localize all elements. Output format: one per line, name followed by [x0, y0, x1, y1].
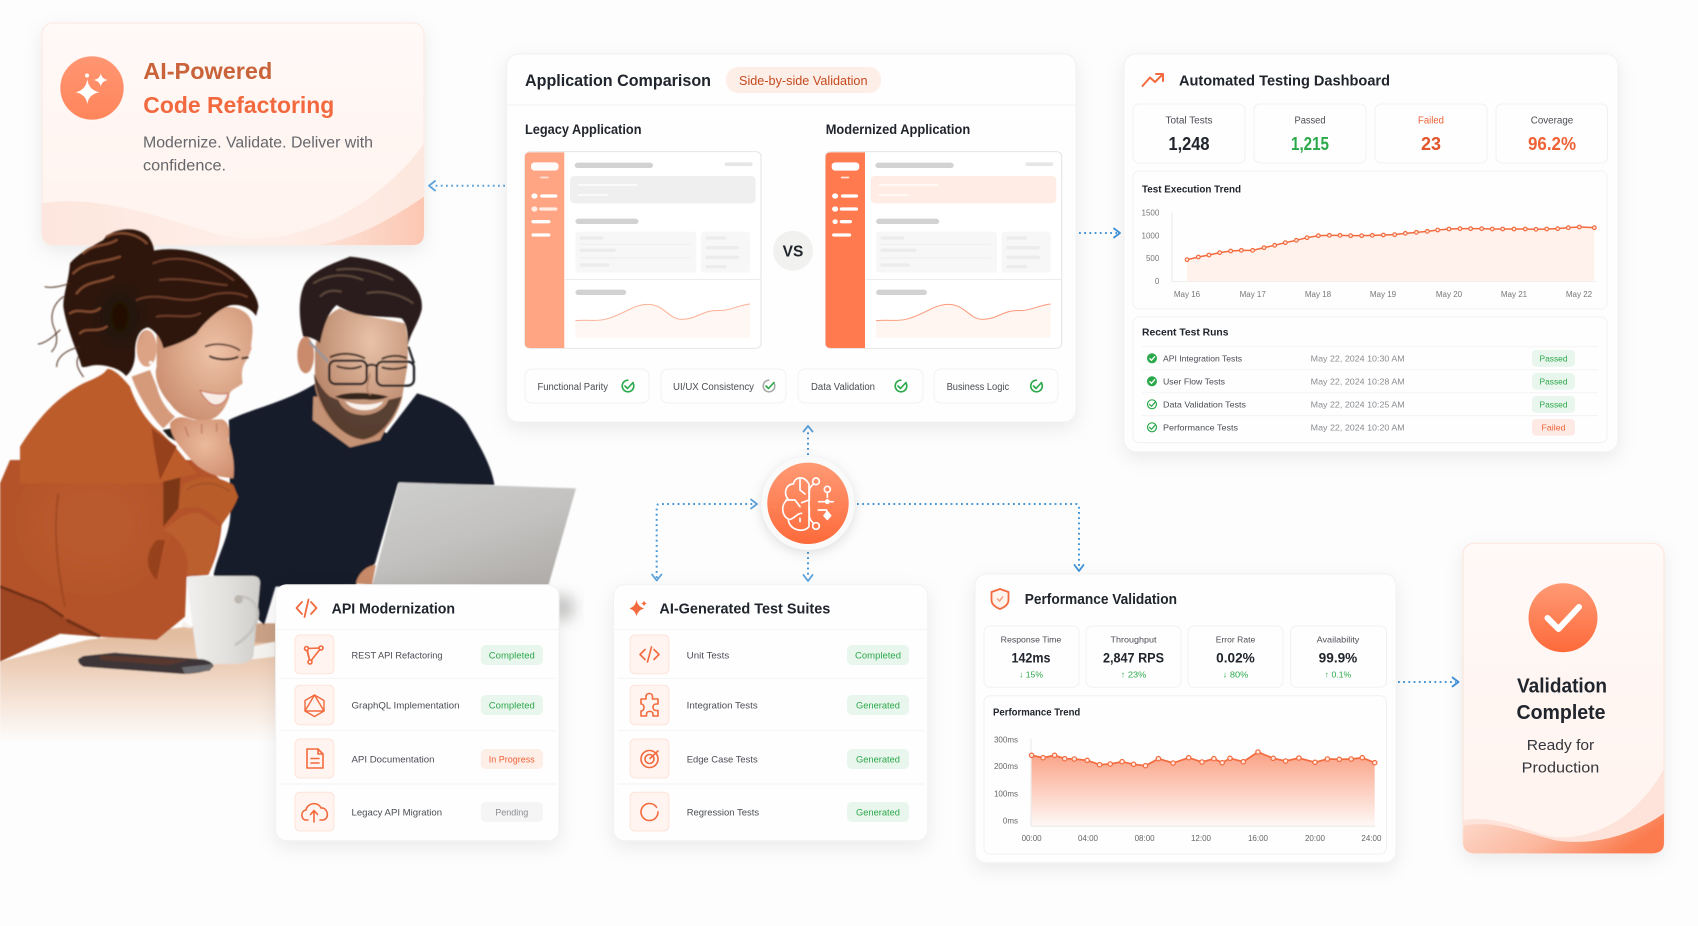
row: data validation tests: Data Validation Tests: [1163, 399, 1246, 409]
stat: error rate: 0.02%: [1216, 651, 1255, 666]
stat: passed: [1254, 104, 1366, 163]
photo: two people at a laptop: [0, 229, 576, 760]
row: API documentation: In Progress: [489, 754, 535, 765]
woman head: [20, 229, 258, 483]
row: data validation tests: May 22, 2024 10:25 AM: [1311, 399, 1405, 409]
row: edge case tests: Generated: [856, 754, 900, 765]
row: API integration tests: May 22, 2024 10:30 AM: [1311, 353, 1405, 363]
heading: Automated Testing Dashboard: [1179, 72, 1390, 89]
stat: availability: Availability: [1317, 634, 1360, 644]
panel: API Modernization: [276, 585, 559, 841]
stat: throughput: ↑ 23%: [1121, 670, 1147, 680]
stat: coverage: [1496, 104, 1608, 163]
heading: Performance Validation: [1025, 591, 1177, 608]
arrow: comparison to intro card: [429, 181, 505, 190]
chart: test execution trend: May 21: [1501, 290, 1528, 299]
icon: code brackets: [296, 600, 316, 617]
chart: performance trend: 0ms: [1003, 817, 1018, 826]
heading: Application Comparison: [525, 71, 711, 90]
row: user flow tests: Passed: [1540, 376, 1568, 386]
description: Modernize. Validate. Deliver with: [143, 134, 373, 152]
stat: failed: [1375, 104, 1487, 163]
row: integration tests: Integration Tests: [687, 700, 758, 712]
row: REST API refactoring: Completed: [489, 650, 535, 662]
stat: availability: 99.9%: [1319, 651, 1357, 666]
chart: performance trend: 12:00: [1191, 834, 1212, 843]
row: performance tests: Failed: [1542, 422, 1566, 432]
chip: UI/UX consistency: UI/UX Consistency: [673, 382, 754, 393]
badge: side-by-side validation: [726, 67, 881, 93]
table: [0, 613, 400, 760]
panel: Validation Complete: [1463, 543, 1664, 853]
chart: performance trend: 04:00: [1078, 834, 1099, 843]
row: unit tests: Completed: [855, 650, 901, 662]
row: API integration tests: Passed: [1540, 353, 1568, 363]
chart: test execution trend: May 17: [1240, 290, 1266, 299]
mockup: legacy application: [525, 152, 761, 348]
stat: passed: Passed: [1294, 115, 1326, 126]
woman sweater and arm: [0, 460, 238, 662]
panel: Performance Validation: [975, 574, 1396, 863]
row: data validation tests: Passed: [1540, 399, 1568, 409]
chip: functional parity: Functional Parity: [538, 382, 608, 393]
subtext: Ready for: [1527, 737, 1594, 754]
row: regression tests: Generated: [856, 808, 900, 818]
chip: UI/UX consistency: [661, 369, 786, 403]
stat: throughput: 2,847 RPS: [1103, 651, 1164, 666]
chart: performance trend: 100ms: [994, 789, 1018, 798]
description: [143, 134, 373, 174]
row: legacy API migration: [295, 792, 543, 831]
chart: test execution trend: May 16: [1174, 290, 1201, 299]
chip: business logic: Business Logic: [947, 382, 1009, 393]
row: unit tests: [630, 635, 909, 674]
stat: failed: 23: [1421, 134, 1441, 154]
chart: test execution trend: May 20: [1436, 290, 1463, 299]
row: edge case tests: [630, 739, 909, 778]
stat: error rate: [1188, 626, 1283, 687]
arrow: hub to performance: [857, 504, 1084, 571]
row: REST API refactoring: [295, 635, 543, 674]
row: data validation tests: [1148, 396, 1575, 413]
stat: failed: Failed: [1418, 115, 1444, 126]
arrow: hub to comparison: [804, 426, 812, 455]
description: confidence.: [143, 158, 226, 174]
subtext: [1522, 737, 1599, 777]
arrow: hub to test suites: [804, 552, 812, 581]
row: user flow tests: [1147, 373, 1575, 390]
man sweater: [214, 383, 494, 625]
chart: performance trend: 20:00: [1305, 834, 1326, 843]
stat: response time: ↓ 15%: [1019, 670, 1043, 680]
row: unit tests: Unit Tests: [687, 650, 729, 662]
stat: response time: Response Time: [1001, 634, 1062, 644]
chart: test execution trend: 1500: [1142, 208, 1160, 218]
subtext: Production: [1522, 760, 1599, 777]
row: performance tests: May 22, 2024 10:20 AM: [1311, 422, 1405, 432]
VS badge: VS: [783, 244, 803, 260]
chart: performance trend: Performance Trend: [993, 708, 1080, 719]
icon: check circle: [1528, 583, 1598, 652]
panel: AI-Powered Code Refactoring: [42, 23, 424, 245]
stat: error rate: Error Rate: [1216, 634, 1256, 644]
chart: test execution trend: [1133, 171, 1607, 309]
icon: shield: [992, 589, 1008, 609]
VS badge: [773, 231, 813, 271]
stat: throughput: Throughput: [1110, 634, 1157, 644]
icon: sparkles: [60, 56, 124, 120]
stat: response time: [984, 626, 1079, 687]
row: GraphQL implementation: Completed: [489, 700, 535, 712]
row: user flow tests: User Flow Tests: [1163, 376, 1225, 386]
row: API integration tests: [1147, 350, 1575, 367]
row: API integration tests: API Integration Tests: [1163, 353, 1242, 363]
row: GraphQL implementation: [295, 685, 543, 725]
subheading: legacy: Legacy Application: [525, 122, 642, 137]
arrow: comparison to dashboard: [1079, 228, 1120, 238]
subheading: modernized: Modernized Application: [826, 122, 970, 137]
row: API documentation: [295, 739, 543, 778]
mockup: modernized application: [826, 152, 1062, 348]
table: recent test runs: Recent Test Runs: [1142, 327, 1229, 339]
stat: total tests: [1133, 104, 1245, 163]
row: legacy API migration: Pending: [495, 808, 528, 818]
heading: AI-Generated Test Suites: [659, 600, 830, 617]
blurred object behind API card: [556, 600, 570, 615]
row: REST API refactoring: REST API Refactoring: [352, 650, 442, 662]
icon: trending up: [1142, 74, 1163, 86]
chip: data validation: [798, 369, 923, 403]
laptop: [356, 482, 576, 587]
chart: performance trend: [984, 696, 1386, 854]
panel: Automated Testing Dashboard: [1124, 54, 1618, 452]
heading: [143, 58, 334, 118]
row: user flow tests: May 22, 2024 10:28 AM: [1311, 376, 1405, 386]
row: integration tests: Generated: [856, 700, 900, 712]
heading: Code Refactoring: [143, 92, 334, 118]
arrow: performance to validation: [1398, 678, 1458, 686]
chart: performance trend: 200ms: [994, 762, 1018, 771]
heading: Complete: [1516, 702, 1606, 724]
stat: total tests: 1,248: [1168, 134, 1210, 154]
stat: response time: 142ms: [1012, 651, 1050, 666]
chart: test execution trend: May 22: [1566, 290, 1593, 299]
chart: performance trend: 16:00: [1248, 834, 1269, 843]
chart: test execution trend: Test Execution Trend: [1142, 184, 1241, 196]
chart: performance trend: 08:00: [1135, 834, 1155, 843]
chart: test execution trend: 1000: [1142, 232, 1160, 240]
row: regression tests: Regression Tests: [687, 808, 759, 818]
stat: total tests: Total Tests: [1166, 115, 1212, 126]
row: edge case tests: Edge Case Tests: [687, 754, 758, 765]
chip: data validation: Data Validation: [811, 382, 875, 393]
heading: [1516, 675, 1607, 724]
chart: performance trend: 300ms: [994, 735, 1018, 744]
mug and phone: [78, 576, 275, 674]
stat: coverage: 96.2%: [1528, 134, 1576, 154]
chip: functional parity: [525, 369, 649, 403]
chart: performance trend: 24:00: [1361, 834, 1382, 843]
stat: coverage: Coverage: [1531, 115, 1574, 126]
icon: sparkle: [630, 600, 647, 616]
chart: test execution trend: 500: [1146, 254, 1160, 263]
table: recent test runs: [1133, 317, 1607, 443]
row: legacy API migration: Legacy API Migration: [352, 808, 442, 818]
chart: test execution trend: 0: [1155, 277, 1160, 286]
badge: side-by-side validation: Side-by-side Validation: [739, 74, 868, 88]
row: GraphQL implementation: GraphQL Implementation: [352, 700, 460, 712]
row: API documentation: API Documentation: [352, 754, 434, 765]
row: regression tests: [630, 792, 909, 831]
stat: passed: 1,215: [1291, 134, 1329, 154]
stat: availability: [1291, 626, 1386, 687]
hub: AI brain icon: [762, 457, 854, 550]
stat: availability: ↑ 0.1%: [1325, 670, 1352, 680]
chart: test execution trend: May 18: [1305, 290, 1332, 299]
heading: AI-Powered: [143, 58, 272, 84]
stat: error rate: ↓ 80%: [1223, 670, 1249, 680]
row: performance tests: Performance Tests: [1163, 422, 1238, 432]
row: integration tests: [630, 685, 909, 725]
row: performance tests: [1148, 419, 1575, 436]
arrow: hub loop to API card and back: [652, 500, 757, 580]
stat: throughput: [1086, 626, 1181, 687]
chart: test execution trend: May 19: [1370, 290, 1397, 299]
heading: API Modernization: [332, 600, 455, 617]
panel: Application Comparison: [506, 54, 1076, 422]
chart: performance trend: 00:00: [1022, 834, 1042, 843]
chip: business logic: [934, 369, 1058, 403]
panel: AI-Generated Test Suites: [613, 585, 928, 841]
heading: Validation: [1517, 675, 1607, 697]
man head: [297, 257, 422, 447]
